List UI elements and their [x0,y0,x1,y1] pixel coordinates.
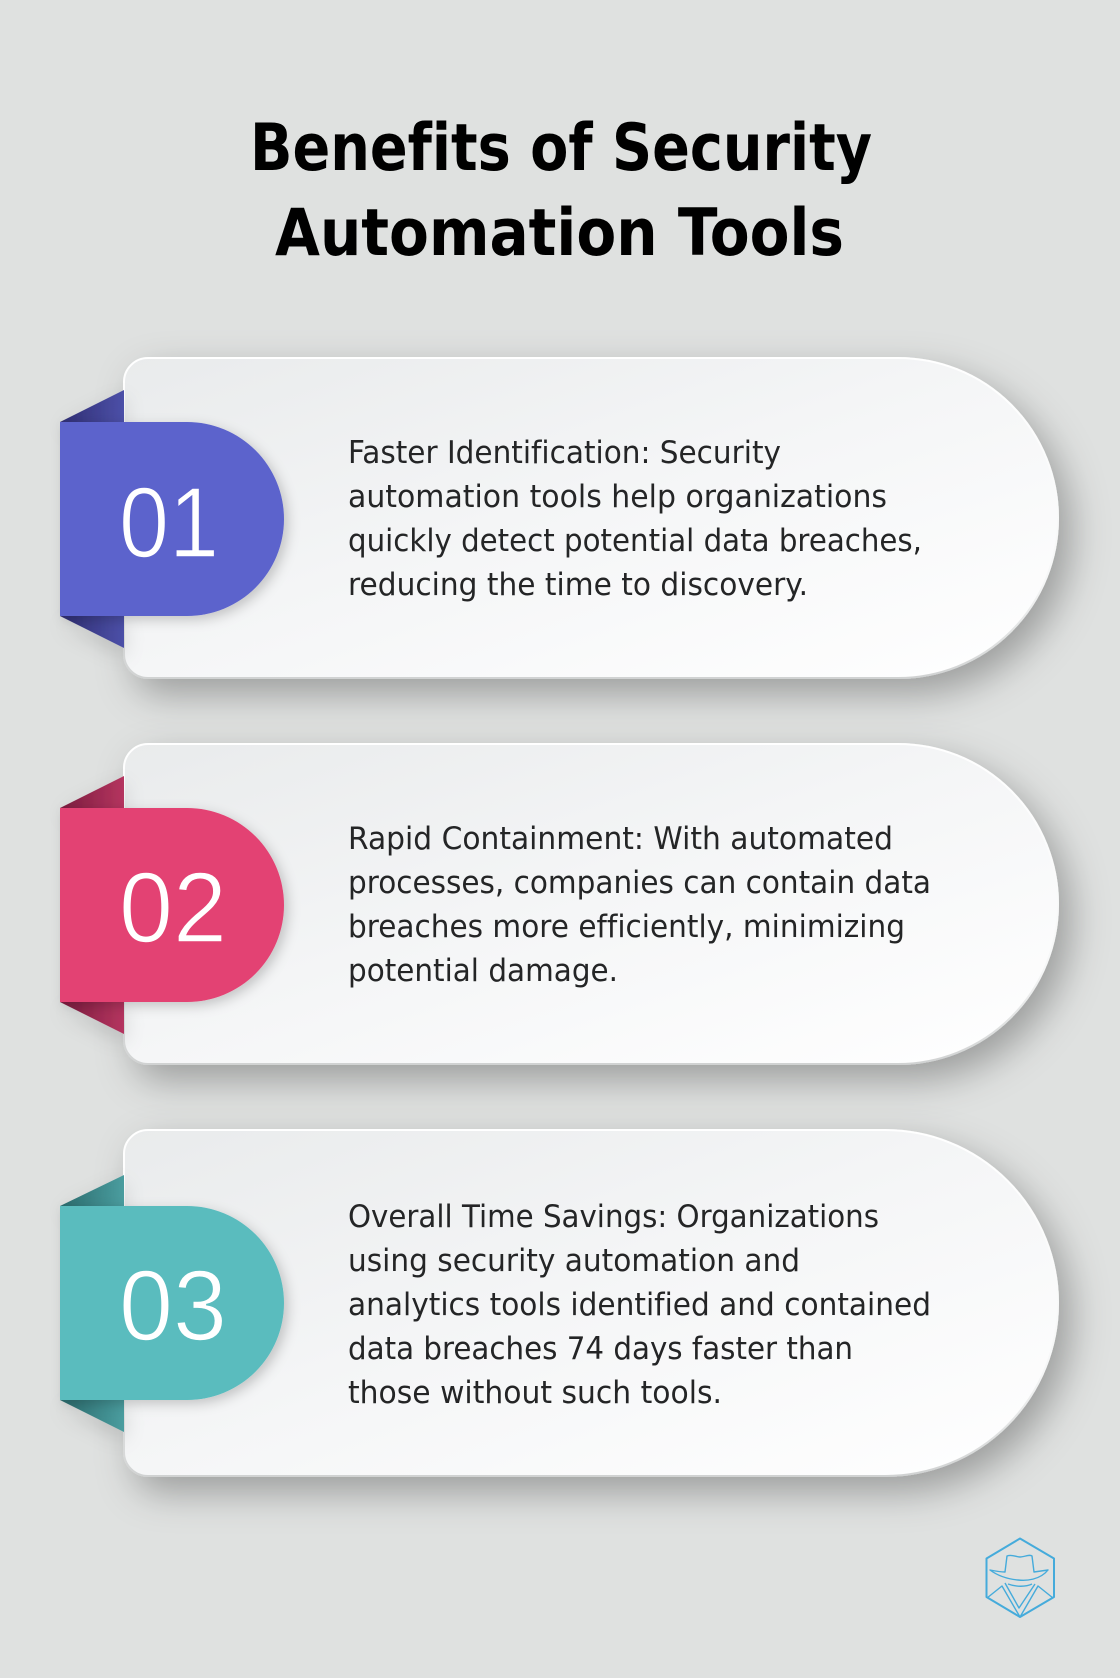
text: faster identification: automation tools help organizations [348,479,887,515]
text: faster identification [348,435,922,603]
text: overall time savings: data breaches 74 days faster than [348,1331,853,1367]
text: rapid containment: breaches more efficiently, minimizing [348,909,905,945]
number badge 03 [60,1206,284,1400]
title [250,111,872,271]
text: faster identification: Faster Identification: Security [348,435,781,471]
number 01: 01 [119,467,219,579]
panel: step 02 rapid containment [60,744,1058,1064]
ribbon fold 02 [60,776,124,1034]
ribbon fold 01 [60,390,124,648]
text: rapid containment [348,821,931,989]
number badge 01 [60,422,284,616]
ribbon fold 03 [60,1175,124,1432]
number 02: 02 [119,852,227,964]
title: Automation Tools [275,196,844,271]
text: rapid containment: Rapid Containment: With automated [348,821,893,857]
text: overall time savings: using security automation and [348,1243,800,1279]
number 03: 03 [119,1250,227,1362]
text: faster identification: quickly detect potential data breaches, [348,523,922,559]
text: overall time savings: Overall Time Savings: Organizations [348,1199,879,1235]
number badge 02 [60,808,284,1002]
icon: hexagon spy logo [986,1538,1054,1617]
card 02 [124,744,1058,1064]
title: Benefits of Security [250,111,872,186]
text: faster identification: reducing the time to discovery. [348,567,808,603]
text: overall time savings: analytics tools identified and contained [348,1287,931,1323]
text: overall time savings: those without such tools. [348,1375,722,1411]
panel: step 01 faster identification [60,358,1058,678]
panel: step 03 overall time savings [60,1130,1058,1476]
text: overall time savings [348,1199,931,1411]
card 01 [124,358,1058,678]
text: rapid containment: processes, companies can contain data [348,865,931,901]
card 03 [124,1130,1058,1476]
text: rapid containment: potential damage. [348,953,618,989]
